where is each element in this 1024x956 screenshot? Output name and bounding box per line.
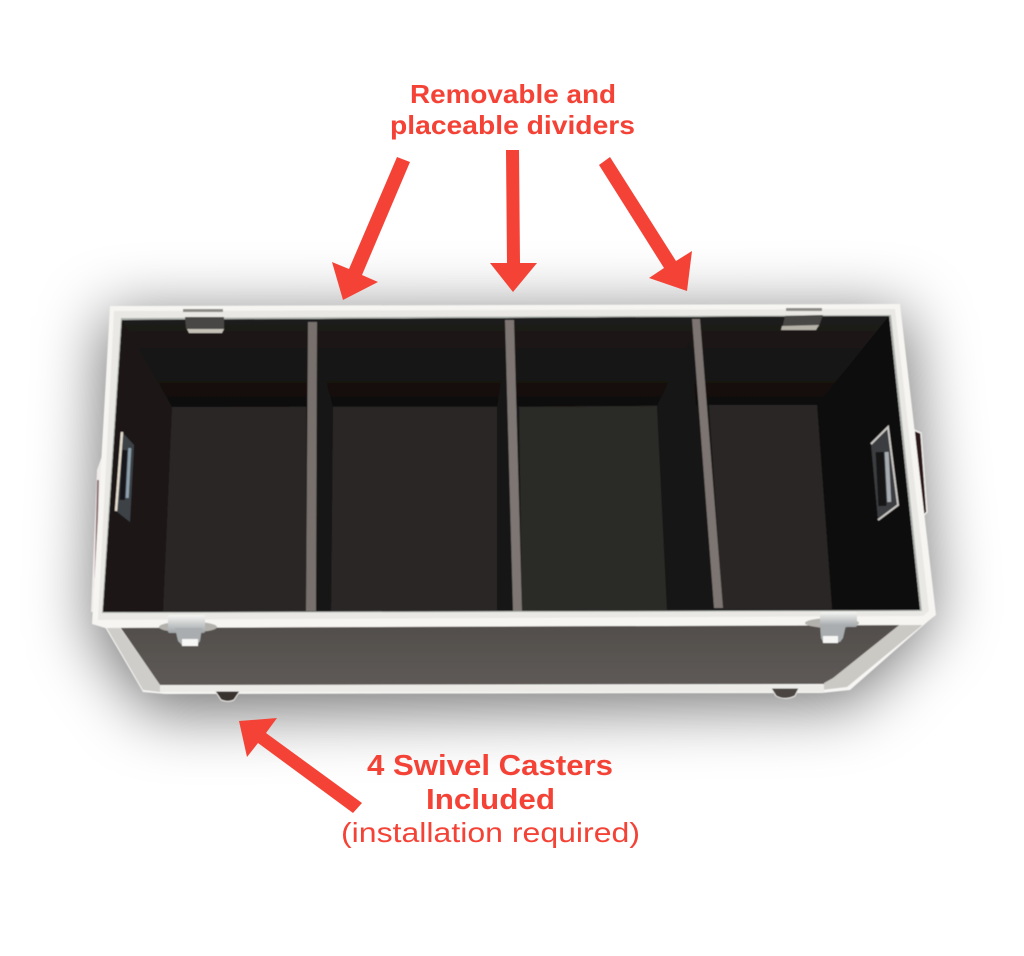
left handle outer trim — [94, 480, 99, 600]
right corner extrusion — [822, 618, 931, 690]
rim shading — [98, 309, 929, 620]
back wall — [122, 316, 889, 407]
case front panel — [102, 616, 934, 694]
right wall — [817, 316, 920, 610]
divider 1 side face — [315, 345, 333, 611]
heading: removable and placeable dividers: Removable and — [410, 79, 616, 109]
arrow: swivel casters — [239, 718, 362, 813]
handle right inner — [871, 427, 898, 520]
divider 3 side face — [657, 340, 714, 610]
bottom rail — [160, 685, 824, 692]
floor section 2 — [331, 407, 497, 611]
left wall — [103, 320, 172, 612]
latch right — [805, 612, 859, 643]
left corner extrusion — [105, 625, 170, 692]
divider 3 edge — [692, 319, 723, 608]
side handle right outer — [914, 430, 927, 518]
caption: swivel casters: Included — [426, 784, 555, 816]
rim inner dark line — [102, 315, 922, 613]
arrow: middle divider — [490, 150, 537, 292]
caption: swivel casters — [341, 750, 640, 848]
latch left — [159, 615, 217, 646]
case drop shadow — [92, 314, 934, 712]
swivel caster right — [771, 688, 799, 698]
arrow: right divider — [599, 157, 692, 291]
handle left inner — [116, 432, 134, 522]
side handle left outer — [91, 450, 104, 612]
heading: removable and placeable dividers: placeable dividers — [390, 110, 635, 140]
caption: swivel casters: 4 Swivel Casters — [367, 750, 613, 782]
floor section 4 — [709, 405, 832, 609]
swivel caster left — [215, 691, 240, 702]
floor section 3 — [519, 406, 667, 611]
heading: removable and placeable dividers — [390, 79, 635, 140]
floor section 1 — [163, 407, 306, 612]
open flight case — [91, 304, 936, 702]
caption: swivel casters: (installation required) — [341, 817, 640, 848]
divider 1 edge — [306, 322, 317, 611]
aluminium rim — [92, 304, 936, 628]
hinge left — [183, 309, 224, 333]
hinge right — [781, 308, 823, 330]
divider 2 side face — [497, 350, 513, 611]
case interior — [103, 316, 920, 612]
arrow: left divider — [332, 157, 410, 300]
divider 2 edge — [505, 320, 522, 611]
